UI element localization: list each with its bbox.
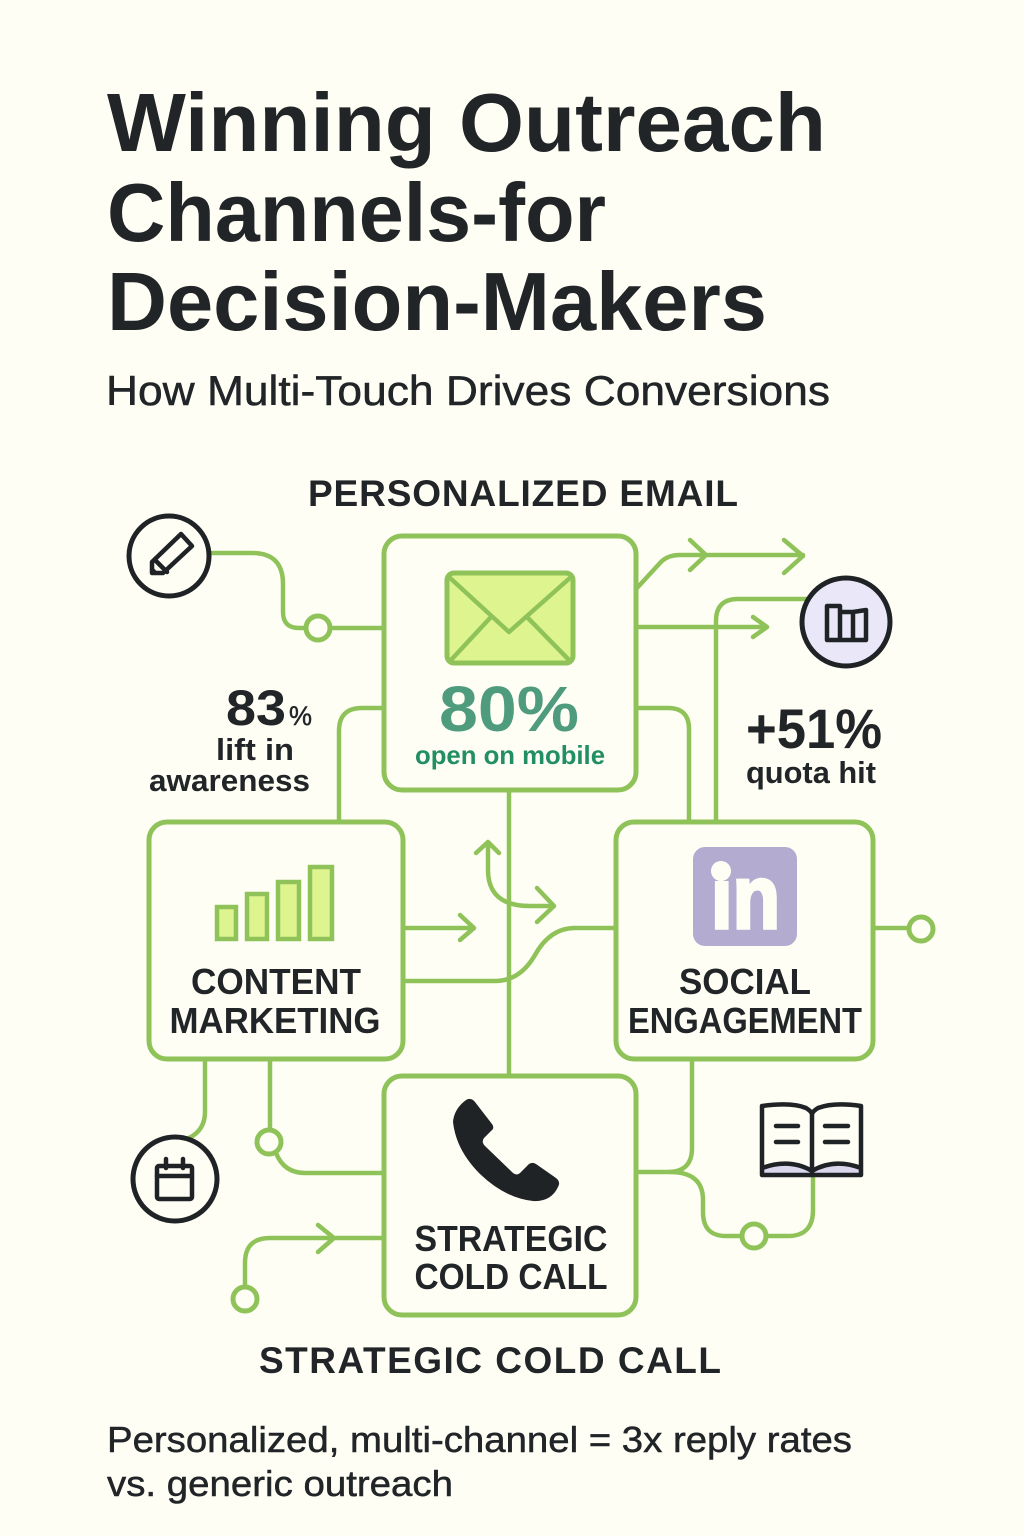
panel: strategic cold call: [384, 1076, 636, 1315]
stat: 83% lift in awareness: 83: [226, 680, 286, 736]
panel label: ENGAGEMENT: [628, 1000, 862, 1041]
icon: pencil: [129, 516, 209, 596]
connector dot: [742, 1224, 766, 1248]
panel label: [414, 1218, 608, 1297]
icon: linkedin: in: [711, 848, 780, 948]
stat: 83% lift in awareness: awareness: [149, 763, 310, 798]
stat: 83% lift in awareness: %: [289, 701, 312, 731]
footer text: vs. generic outreach: [107, 1463, 453, 1504]
panel: social engagement: [616, 822, 873, 1059]
footer text: [107, 1419, 852, 1504]
panel label: MARKETING: [170, 1000, 380, 1041]
title: Decision-Makers: [107, 255, 767, 348]
subtitle: How Multi-Touch Drives Conversions: [106, 367, 830, 414]
panel label: STRATEGIC: [414, 1218, 608, 1259]
stat: 83% lift in awareness: [149, 680, 312, 798]
icon: phone: [453, 1099, 559, 1201]
stat: +51% quota hit: [746, 697, 882, 790]
panel label: [628, 961, 862, 1041]
title: [107, 76, 826, 348]
connector lines: [189, 540, 908, 1288]
panel: personalized email: [384, 536, 636, 790]
panel label: CONTENT: [191, 961, 361, 1002]
connector dot: [909, 917, 933, 941]
icon: bar chart circle: [802, 578, 890, 666]
footer text: Personalized, multi-channel = 3x reply rates: [107, 1419, 852, 1460]
icon: calendar: [133, 1137, 217, 1221]
stat: +51% quota hit: +51%: [746, 697, 882, 760]
stat label: open on mobile: [415, 740, 605, 770]
heading: strategic cold call: STRATEGIC COLD CALL: [259, 1340, 721, 1381]
title: Channels-for: [107, 166, 606, 259]
title: Winning Outreach: [107, 76, 826, 169]
stat: 83% lift in awareness: lift in: [216, 732, 294, 767]
connector dot: [257, 1130, 281, 1154]
connector dot: [306, 616, 330, 640]
stat: 80%: 80%: [439, 673, 579, 745]
stat: +51% quota hit: quota hit: [746, 755, 876, 790]
panel: content marketing: [149, 822, 403, 1059]
panel label: SOCIAL: [679, 961, 811, 1002]
panel label: COLD CALL: [414, 1256, 608, 1297]
connector dot: [233, 1287, 257, 1311]
icon: rising bars: [217, 867, 332, 939]
icon: envelope: [447, 573, 573, 663]
panel label: [170, 961, 380, 1041]
icon: open book: [762, 1104, 861, 1175]
heading: personalized email: PERSONALIZED EMAIL: [308, 473, 738, 514]
